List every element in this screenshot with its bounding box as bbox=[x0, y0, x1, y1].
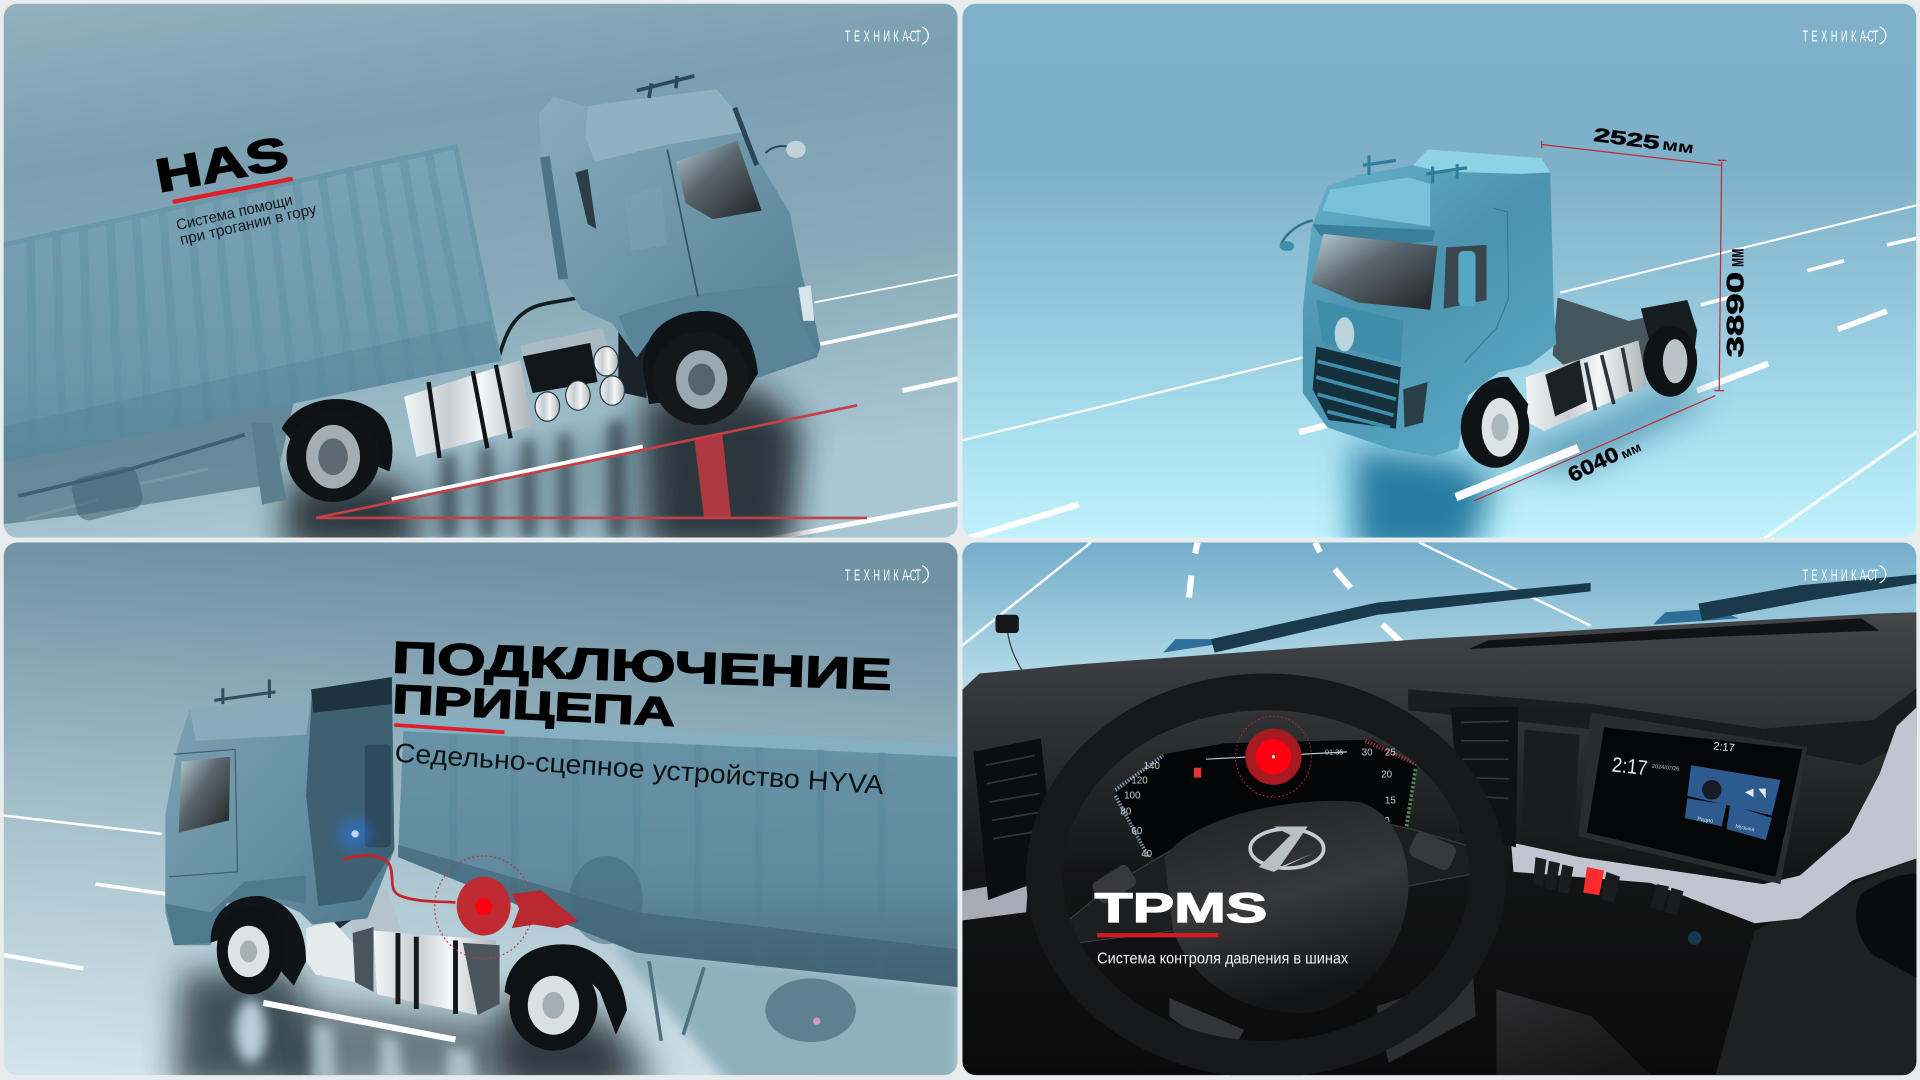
front wheel bbox=[1460, 398, 1530, 468]
steering wheel hub bbox=[1164, 801, 1408, 1013]
steering wheel rim bbox=[1044, 692, 1488, 1059]
rear wheel bbox=[1643, 326, 1697, 397]
road stripe on the slope bbox=[392, 447, 643, 500]
subtitle HAS: при трогании в гору bbox=[178, 201, 318, 249]
tractor cab bbox=[1280, 149, 1556, 457]
fuel tanks bbox=[1526, 340, 1647, 431]
trailer ghost wheel and legs bbox=[649, 961, 856, 1042]
lower right floor under trailer bbox=[612, 943, 958, 1080]
red electrical cable bbox=[343, 855, 456, 902]
hill gradient angle indicator bbox=[316, 405, 867, 518]
dimension: height 3890: 3890 bbox=[1723, 272, 1750, 358]
long road stripe bbox=[1456, 448, 1578, 497]
hose to trailer bbox=[500, 298, 578, 355]
road markings bbox=[962, 542, 1591, 645]
instrument cluster: 15 bbox=[1385, 795, 1396, 806]
blue stalk button bbox=[1688, 931, 1701, 945]
instrument cluster: 60 bbox=[1131, 826, 1143, 837]
truck floor reflection bbox=[1353, 380, 1702, 557]
steering wheel controls bbox=[1090, 830, 1458, 905]
center vent bbox=[1451, 707, 1518, 847]
panel: HAS hill-start assist bbox=[4, 4, 960, 551]
logo: ТЕХНИКА-СТ bbox=[845, 27, 921, 45]
left light trim bbox=[960, 879, 1029, 921]
infotainment display: 2:17 bbox=[1611, 754, 1649, 780]
front wheel arch bbox=[643, 311, 758, 404]
heading TPMS: TPMS bbox=[1095, 884, 1267, 931]
road markings bbox=[24, 274, 960, 540]
fuel tanks bbox=[306, 921, 500, 1015]
floor plate bbox=[1496, 989, 1651, 1075]
dimension: width 2525: мм bbox=[1661, 136, 1695, 158]
instrument cluster: 120 bbox=[1131, 776, 1148, 787]
logo: ТЕХНИКА-СТ bbox=[1802, 566, 1878, 584]
panel: tractor dimensions bbox=[960, 4, 1920, 557]
front wheel bbox=[217, 906, 285, 994]
dimension: length 6040: мм bbox=[1618, 439, 1644, 462]
logo: ТЕХНИКА-СТ bbox=[845, 566, 921, 584]
dimension: length 6040: 6040 bbox=[1564, 443, 1623, 487]
dimension: length 6040 bbox=[1568, 444, 1642, 481]
instrument cluster: 40 bbox=[1141, 849, 1153, 860]
right windshield wiper bbox=[1653, 574, 1920, 624]
road markings bbox=[4, 816, 165, 969]
chassis grid and hose bbox=[326, 855, 402, 940]
dimension lines bbox=[1474, 141, 1727, 501]
long road stripe bbox=[263, 1003, 456, 1040]
instrument cluster: 10 bbox=[1379, 816, 1390, 827]
panel 3 background bbox=[4, 542, 958, 1075]
rear wheel bbox=[286, 424, 378, 502]
semi-trailer container bbox=[4, 147, 500, 463]
chassis fins and engine block bbox=[520, 321, 649, 398]
infotainment display bbox=[1578, 713, 1807, 884]
light trim bbox=[1511, 704, 1920, 923]
dashcam bbox=[996, 615, 1022, 671]
rear wheel bbox=[509, 960, 598, 1051]
lower right console bbox=[1714, 857, 1920, 1080]
instrument cluster bbox=[1116, 740, 1417, 882]
infotainment display: Радио bbox=[1697, 816, 1713, 825]
front wheel arch bbox=[211, 896, 306, 986]
heading underline bbox=[1097, 933, 1218, 937]
dimension: height 3890 bbox=[1726, 249, 1744, 358]
instrument cluster: 30 bbox=[1362, 748, 1373, 759]
heading underline bbox=[394, 725, 504, 732]
left windshield wiper bbox=[1163, 583, 1591, 653]
blue indicator light bbox=[339, 818, 371, 850]
heading coupling: ПРИЦЕПА bbox=[391, 676, 676, 735]
instrument cluster: 01:36 bbox=[1325, 747, 1343, 756]
road markings bbox=[960, 204, 1920, 540]
trailer chassis ghost bbox=[4, 402, 294, 524]
dimension: width 2525 bbox=[1594, 128, 1693, 154]
dimension: height 3890: мм bbox=[1726, 249, 1749, 267]
steering wheel side pods bbox=[1060, 823, 1485, 943]
dashboard body bbox=[960, 612, 1920, 1080]
infotainment display: 2:17 bbox=[1713, 740, 1735, 755]
coupling highlight bbox=[435, 856, 578, 959]
tractor cab bbox=[539, 76, 820, 378]
air tanks bbox=[535, 347, 624, 421]
instrument cluster: 20 bbox=[1381, 770, 1393, 781]
front wheel bbox=[660, 350, 746, 425]
left vent bbox=[973, 738, 1056, 900]
semi-trailer container bbox=[398, 715, 958, 987]
steering wheel lower spokes bbox=[1169, 973, 1476, 1063]
panel 1 background bbox=[4, 4, 958, 538]
heading coupling bbox=[391, 633, 892, 735]
panel: TPMS cockpit bbox=[960, 542, 1920, 1080]
panel: trailer coupling bbox=[4, 542, 958, 1080]
ghost wheel arch behind coupling bbox=[569, 856, 643, 944]
subtitle HAS: Система помощи bbox=[175, 192, 294, 234]
fuel tank bbox=[404, 360, 533, 458]
subtitle TPMS: Система контроля давления в шинах bbox=[1097, 951, 1348, 968]
truck floor reflection bbox=[282, 387, 802, 551]
hazard and control switches bbox=[1533, 857, 1684, 915]
TPMS warning highlight bbox=[1236, 716, 1311, 797]
heading coupling: ПОДКЛЮЧЕНИЕ bbox=[391, 633, 892, 700]
dashboard top vent bbox=[1469, 618, 1880, 649]
subtitle coupling: Седельно-сцепное устройство HYVA bbox=[394, 738, 885, 800]
infotainment display: 2024/07/26 bbox=[1652, 764, 1680, 773]
dimension: width 2525: 2525 bbox=[1592, 125, 1661, 154]
instrument cluster: 25 bbox=[1385, 748, 1396, 759]
instrument cluster: 80 bbox=[1120, 806, 1132, 817]
panel 2 background bbox=[962, 4, 1916, 538]
front wheel arch bbox=[1471, 376, 1528, 412]
rear wheel fender bbox=[282, 399, 392, 471]
rear wheel fender bbox=[504, 944, 627, 1035]
rear chassis bbox=[1552, 298, 1698, 368]
switch blank panel bbox=[1522, 730, 1580, 845]
truck floor reflection bbox=[174, 967, 661, 1080]
glove pocket bbox=[1856, 874, 1920, 980]
heading underline bbox=[173, 179, 293, 202]
heading HAS: HAS bbox=[152, 127, 292, 202]
tractor cab bbox=[165, 677, 394, 945]
logo: ТЕХНИКА-СТ bbox=[1802, 27, 1878, 45]
infotainment display: Музыка bbox=[1735, 824, 1756, 833]
instrument cluster: 140 bbox=[1144, 761, 1161, 772]
panel 4 sky and road bbox=[962, 542, 1916, 696]
brand emblem bbox=[1250, 827, 1324, 872]
instrument cluster: 100 bbox=[1124, 790, 1141, 801]
dashboard shelf bbox=[1408, 686, 1920, 765]
